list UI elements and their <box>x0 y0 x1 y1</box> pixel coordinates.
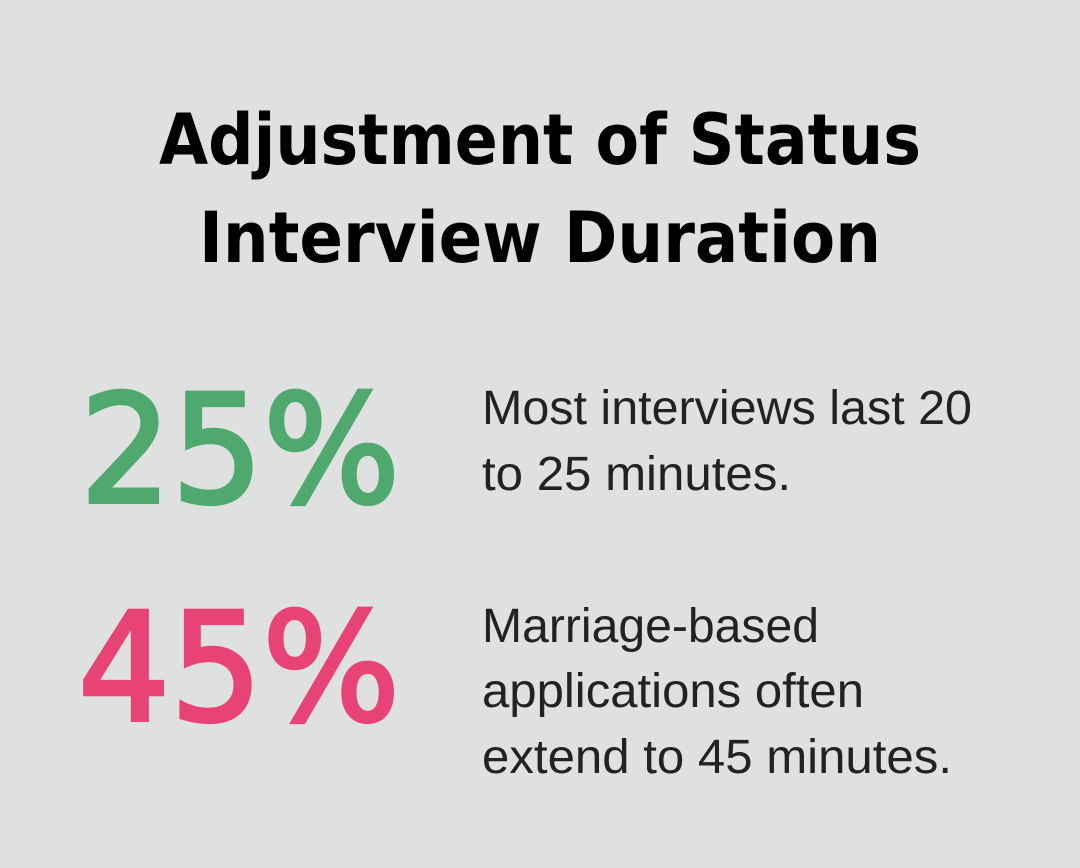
text block: most interviews: to 25 minutes. <box>482 448 791 501</box>
title: Adjustment of Status <box>159 99 921 181</box>
text block: marriage-based applications <box>482 600 952 784</box>
title: Interview Duration <box>199 197 881 279</box>
title <box>159 99 921 279</box>
text block: marriage-based applications: applications often <box>482 665 864 718</box>
text block: marriage-based applications: extend to 45 minutes. <box>482 731 952 784</box>
stat: 45%: 45% <box>78 582 400 756</box>
text block: most interviews <box>482 382 972 501</box>
text block: marriage-based applications: Marriage-based <box>482 600 819 653</box>
text block: most interviews: Most interviews last 20 <box>482 382 972 435</box>
stat: 25%: 25% <box>80 364 400 538</box>
